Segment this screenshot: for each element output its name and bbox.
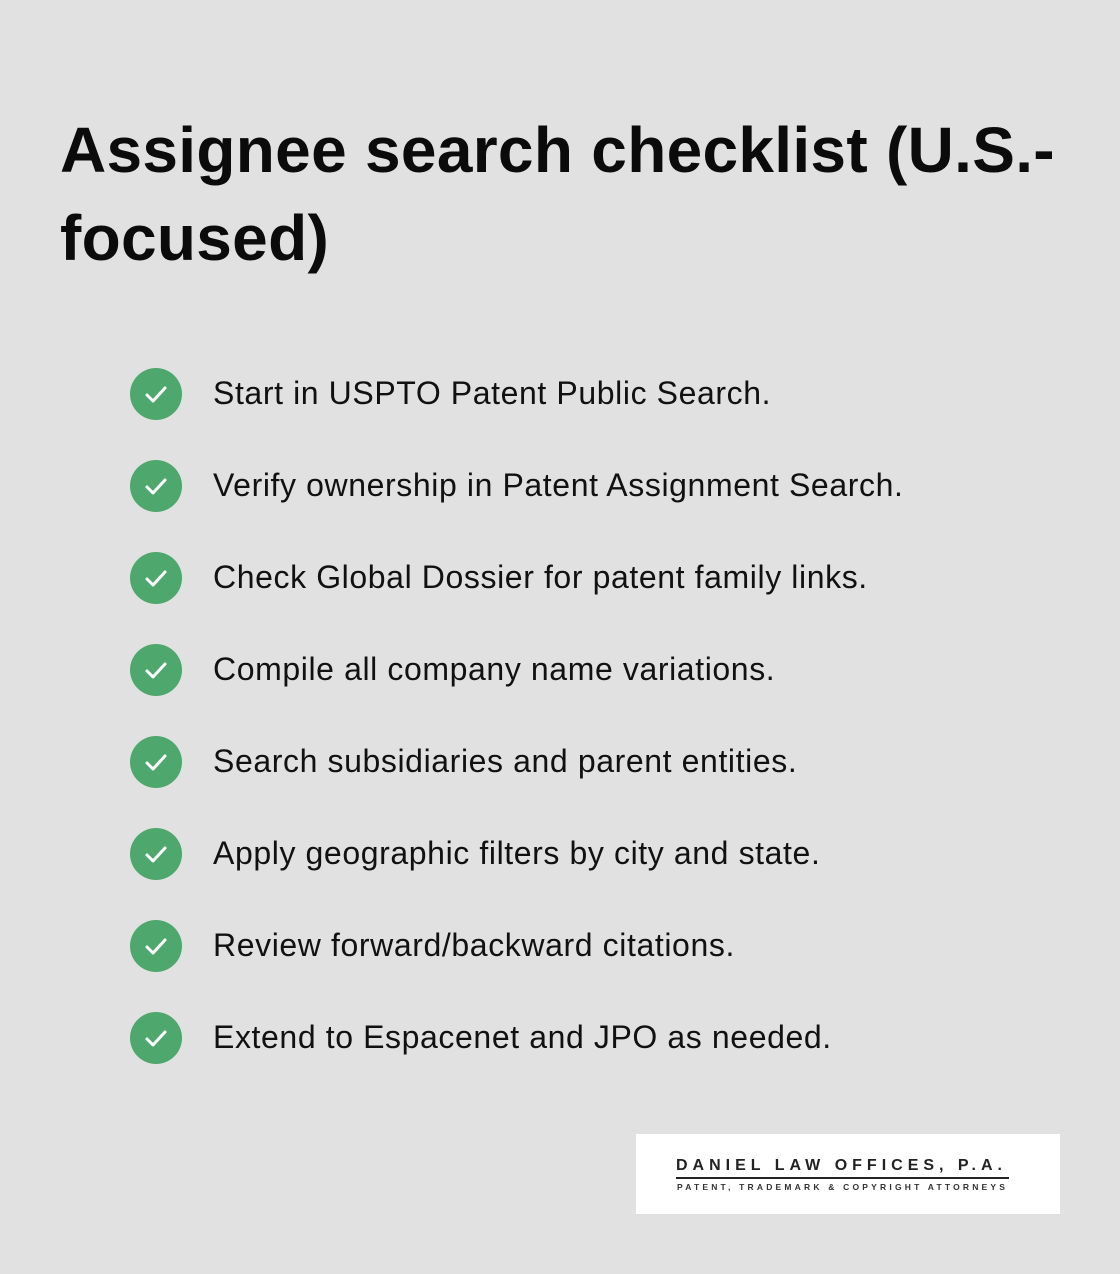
logo: DANIEL LAW OFFICES, P.A. bbox=[676, 1157, 1007, 1174]
item 8 bbox=[130, 1012, 832, 1064]
title: focused) bbox=[60, 202, 329, 274]
item 1: Start in USPTO Patent Public Search. bbox=[213, 375, 771, 411]
item 7: Review forward/backward citations. bbox=[213, 927, 735, 963]
logo bbox=[636, 1134, 1060, 1214]
item 5: Search subsidiaries and parent entities. bbox=[213, 743, 797, 779]
logo: PATENT, TRADEMARK & COPYRIGHT ATTORNEYS bbox=[677, 1182, 1008, 1192]
item 7 bbox=[130, 920, 735, 972]
item 6: Apply geographic filters by city and state. bbox=[213, 835, 820, 871]
item 3: Check Global Dossier for patent family links. bbox=[213, 559, 868, 595]
item 6 bbox=[130, 828, 820, 880]
checklist bbox=[130, 368, 903, 1064]
title: Assignee search checklist (U.S.- bbox=[60, 114, 1055, 186]
item 4 bbox=[130, 644, 775, 696]
item 2 bbox=[130, 460, 903, 512]
item 8: Extend to Espacenet and JPO as needed. bbox=[213, 1019, 832, 1055]
item 3 bbox=[130, 552, 868, 604]
item 4: Compile all company name variations. bbox=[213, 651, 775, 687]
item 2: Verify ownership in Patent Assignment Search. bbox=[213, 467, 903, 503]
title bbox=[60, 114, 1055, 274]
item 5 bbox=[130, 736, 797, 788]
item 1 bbox=[130, 368, 771, 420]
